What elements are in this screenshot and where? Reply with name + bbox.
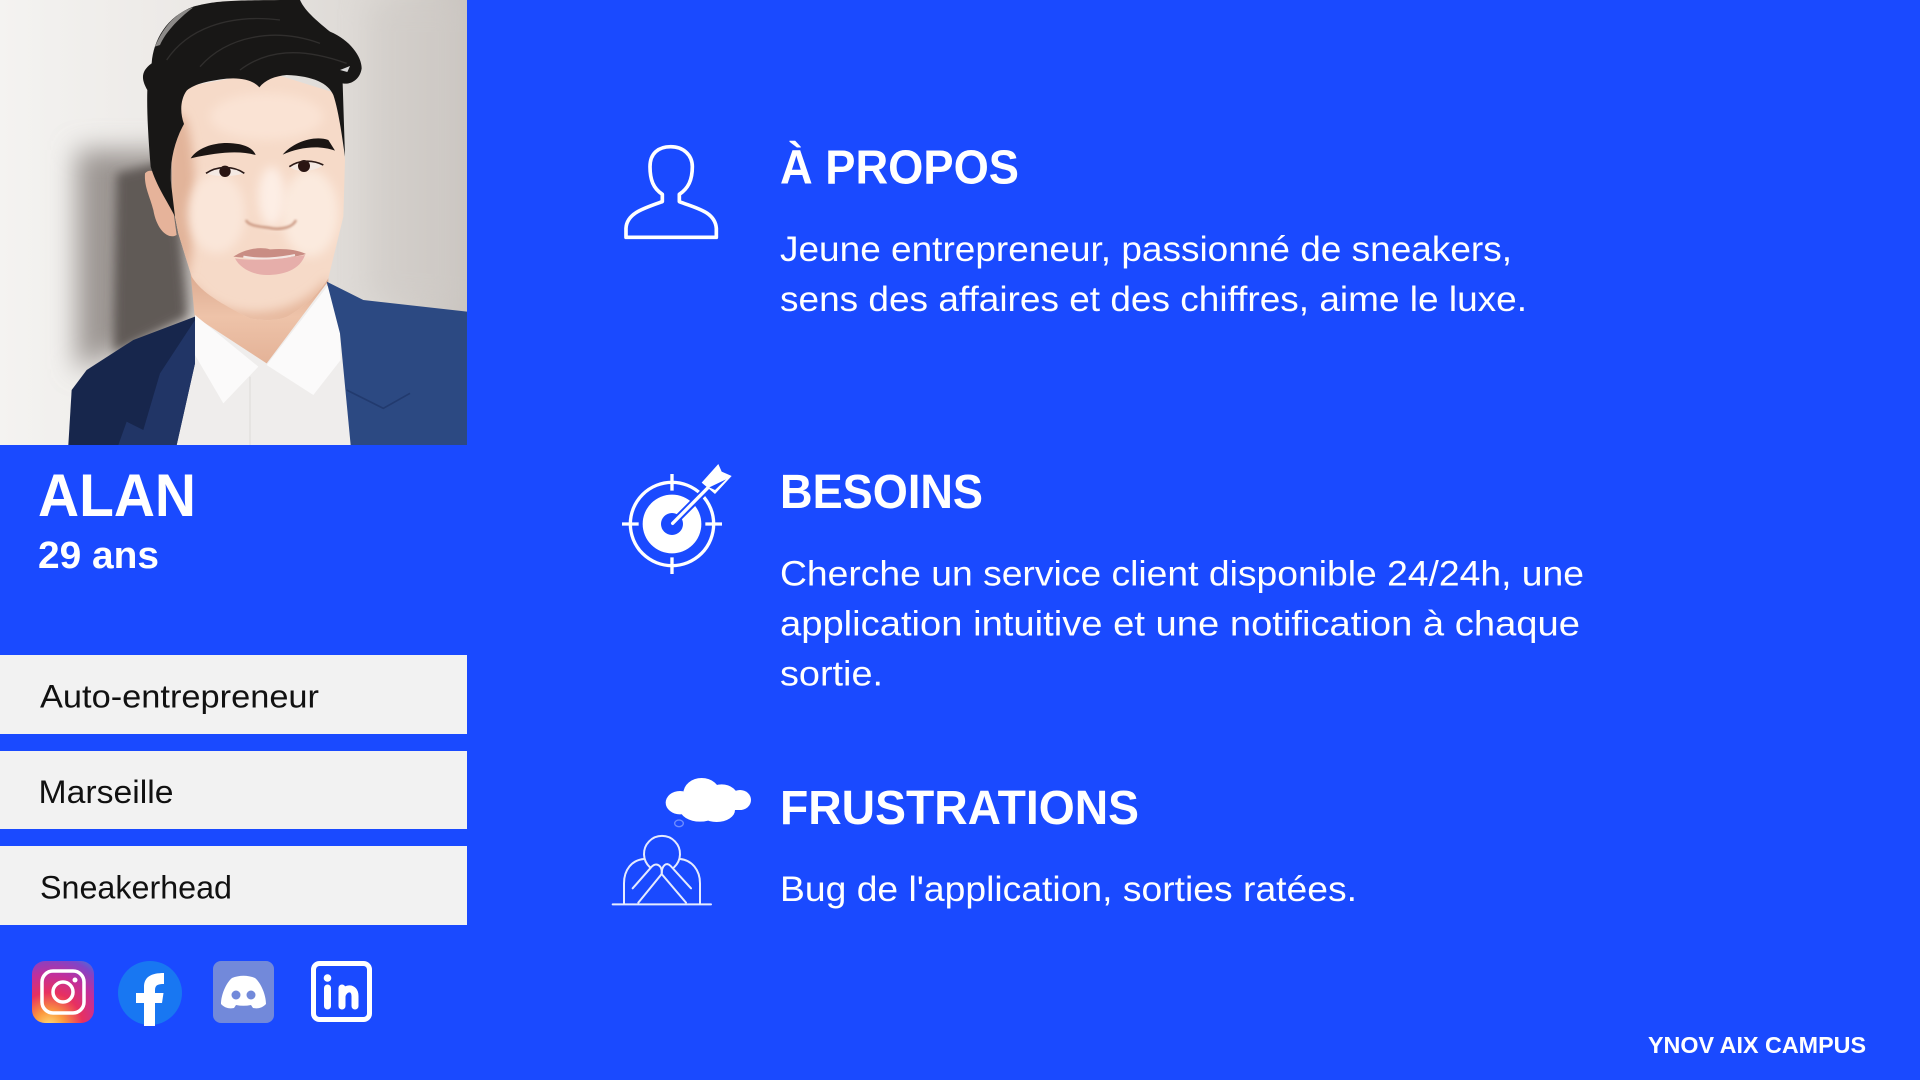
neck — [190, 274, 328, 364]
heading: BESOINS: BESOINS — [780, 466, 983, 519]
text: needs: application intuitive et une notification à chaque — [780, 604, 1580, 644]
icon: frustrated person with cloud — [613, 778, 751, 904]
tag: profession: Auto-entrepreneur — [40, 678, 319, 714]
text: about: Jeune entrepreneur, passionné de sneakers, — [780, 230, 1512, 269]
icon: discord — [213, 961, 274, 1023]
text: about: sens des affaires et des chiffres, aime le luxe. — [780, 280, 1527, 319]
icon: person — [626, 147, 716, 237]
jacket — [68, 317, 195, 445]
heading: FRUSTRATIONS: FRUSTRATIONS — [780, 782, 1139, 835]
name: ALAN: ALAN — [38, 462, 196, 529]
tag: city — [0, 751, 467, 829]
tag: interest — [0, 846, 467, 925]
text: needs: sortie. — [780, 654, 883, 694]
hair — [143, 0, 362, 217]
icon: facebook — [118, 961, 182, 1026]
ear — [145, 171, 177, 236]
text: about — [780, 230, 1527, 319]
shirt — [205, 284, 350, 445]
cloud — [666, 778, 751, 822]
text: frustrations: Bug de l'application, sorties ratées. — [780, 870, 1357, 909]
tag: profession — [0, 655, 467, 734]
face — [172, 72, 345, 320]
photo: portrait of Alan — [0, 0, 467, 445]
footer: campus name: YNOV AIX CAMPUS — [1648, 1032, 1866, 1058]
nose and mouth — [246, 220, 296, 229]
tag: interest: Sneakerhead — [40, 870, 232, 906]
text: needs: Cherche un service client disponible 24/24h, une — [780, 554, 1584, 594]
text: needs — [780, 554, 1584, 694]
brows — [191, 143, 256, 158]
icon: linkedin — [314, 964, 370, 1020]
age: 29 ans — [38, 535, 159, 577]
tag: city: Marseille — [38, 774, 174, 810]
icon: instagram — [32, 961, 94, 1023]
heading: À PROPOS: À PROPOS — [780, 140, 1019, 194]
eyes — [206, 168, 244, 176]
icon: target — [622, 464, 732, 574]
